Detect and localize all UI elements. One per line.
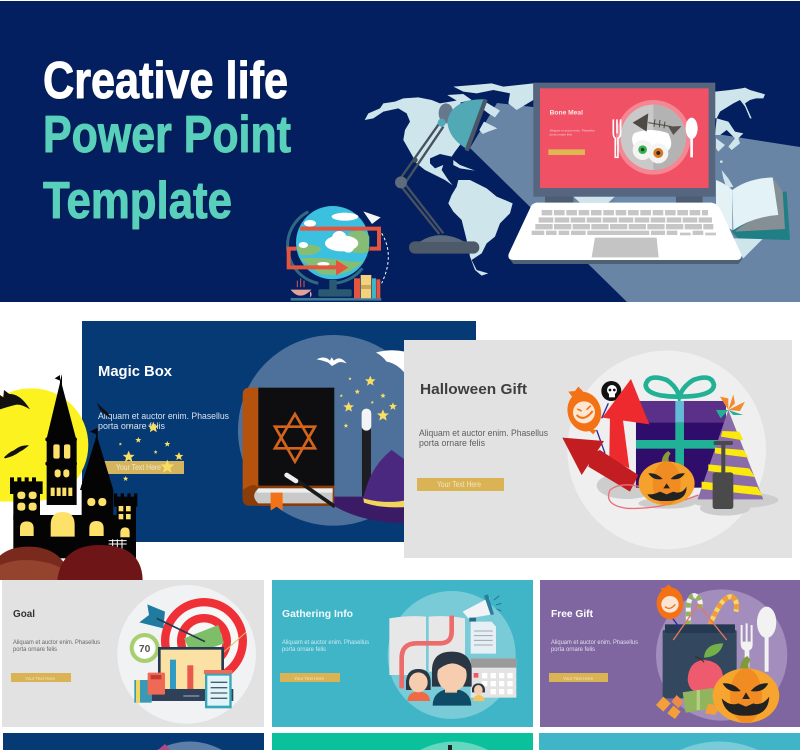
panel: halloween gift slide — [404, 340, 792, 558]
magic box button: Your Text Here — [116, 463, 161, 472]
gathering info button: Your Text Here — [294, 676, 324, 682]
icon: magic wand — [362, 409, 371, 497]
icon: wrapped candies — [656, 688, 721, 719]
icon: party hat — [698, 394, 763, 499]
gathering info description — [282, 639, 369, 653]
gathering info illustration — [388, 591, 516, 719]
icon: target — [161, 598, 247, 684]
icon: open book — [716, 177, 790, 240]
fences — [0, 539, 127, 562]
icon: pumpkin balloon — [657, 584, 683, 628]
magic box button — [101, 461, 184, 474]
laptop screen: bone meal slide: Bone Meal — [550, 110, 583, 117]
magic box description — [98, 411, 229, 432]
gathering info description: Aliquam et auctor enim. Phasellus — [282, 639, 369, 646]
icon: laptop chart — [152, 647, 233, 701]
icon: calendar — [471, 658, 516, 698]
icon: laptop — [508, 83, 742, 264]
halloween gift description: porta ornare felis — [419, 438, 485, 449]
icon: skull balloon — [601, 381, 621, 418]
icon: stars — [119, 422, 183, 481]
gathering info heading: Gathering Info — [282, 608, 353, 620]
title: Power Point — [43, 106, 291, 164]
panel: magic box slide — [82, 321, 476, 542]
free gift description — [551, 639, 638, 653]
laptop screen: bone meal slide — [548, 100, 698, 175]
icon: pumpkin — [639, 451, 695, 505]
free gift heading: Free Gift — [551, 608, 593, 620]
free gift description: Aliquam et auctor enim. Phasellus — [551, 639, 638, 646]
icon: witch hat — [334, 450, 410, 523]
gathering info description: porta ornare felis — [282, 646, 326, 653]
free gift button: Your Text Here — [563, 676, 593, 682]
panel: hero banner — [0, 1, 800, 302]
icon: money — [184, 625, 224, 655]
icon: pump — [713, 441, 733, 509]
goal description — [13, 639, 100, 653]
panel: bottom row slides — [3, 733, 800, 750]
laptop screen: bone meal slide: Aliquam et auctor enim. Phasellus — [550, 129, 595, 133]
icon: route book — [389, 616, 465, 688]
icon: desk lamp — [395, 99, 486, 254]
halloween gift button — [417, 478, 504, 491]
icon: moon — [0, 388, 88, 502]
icon: pumpkin balloon — [563, 387, 606, 453]
icon: left figure — [406, 669, 431, 701]
world map: eurasia and australia — [715, 88, 765, 258]
castle windows — [17, 444, 131, 537]
icon: bats — [317, 350, 405, 373]
halloween gift heading: Halloween Gift — [420, 381, 527, 398]
hills — [0, 547, 72, 580]
laptop keyboard — [535, 213, 713, 227]
icon: notebooks — [134, 673, 165, 703]
halloween gift description — [419, 428, 548, 449]
goal illustration — [117, 585, 256, 724]
magic box illustration — [238, 335, 404, 526]
laptop trackpad — [592, 238, 659, 257]
panel: free gift slide — [540, 580, 800, 727]
laptop screen: bone meal slide: porta ornare felis — [550, 133, 573, 137]
title: Template — [45, 174, 234, 232]
icon: woman figure — [432, 652, 472, 706]
free gift illustration — [656, 584, 787, 723]
icon: haunted castle — [0, 374, 183, 580]
icon: dart — [139, 604, 205, 642]
title — [43, 52, 293, 232]
halloween gift illustration — [562, 351, 778, 549]
title: Power Point — [45, 108, 293, 166]
goal description: porta ornare felis — [13, 646, 57, 653]
world map: africa gap — [573, 197, 615, 203]
free gift button — [549, 673, 608, 682]
icon: bats — [0, 390, 110, 458]
icon: pumpkin — [713, 656, 779, 723]
gathering info button — [280, 673, 340, 682]
world map: americas — [365, 83, 533, 276]
goal button — [11, 673, 71, 682]
icon: megaphone — [463, 594, 501, 622]
icon: apple — [688, 643, 723, 692]
magic box description: Aliquam et auctor enim. Phasellus — [98, 411, 229, 422]
icon: document — [471, 622, 496, 654]
title: Creative life — [43, 52, 288, 110]
panel: gathering info slide — [272, 580, 533, 727]
magic box description: porta ornare felis — [98, 421, 165, 432]
halloween gift description: Aliquam et auctor enim. Phasellus — [419, 428, 548, 439]
icon: red arrows — [562, 379, 649, 492]
icon: clipboard — [204, 670, 232, 708]
goal heading: Goal — [13, 608, 35, 620]
icon: gift box — [636, 378, 726, 488]
icon: spell book — [243, 388, 335, 511]
title: Template — [43, 172, 232, 230]
halloween gift button: Your Text Here — [437, 480, 481, 489]
magic box heading: Magic Box — [98, 363, 173, 380]
icon: 70 gauge: 70 — [139, 644, 151, 655]
icon: fuse — [608, 485, 698, 508]
icon: candy canes — [688, 596, 737, 625]
icon: globe with arrows — [287, 206, 388, 301]
panel: goal slide — [2, 580, 264, 727]
goal description: Aliquam et auctor enim. Phasellus — [13, 639, 100, 646]
free gift description: porta ornare felis — [551, 646, 595, 653]
icon: stars — [340, 376, 397, 428]
goal button: Your Text Here — [25, 676, 55, 682]
title: Creative life — [45, 54, 290, 112]
icon: right figure — [472, 683, 485, 701]
icon: fork and spoon — [741, 607, 776, 672]
icon: shopping bag — [663, 604, 737, 698]
lamp light beam — [470, 103, 800, 302]
castle silhouette — [10, 374, 137, 558]
